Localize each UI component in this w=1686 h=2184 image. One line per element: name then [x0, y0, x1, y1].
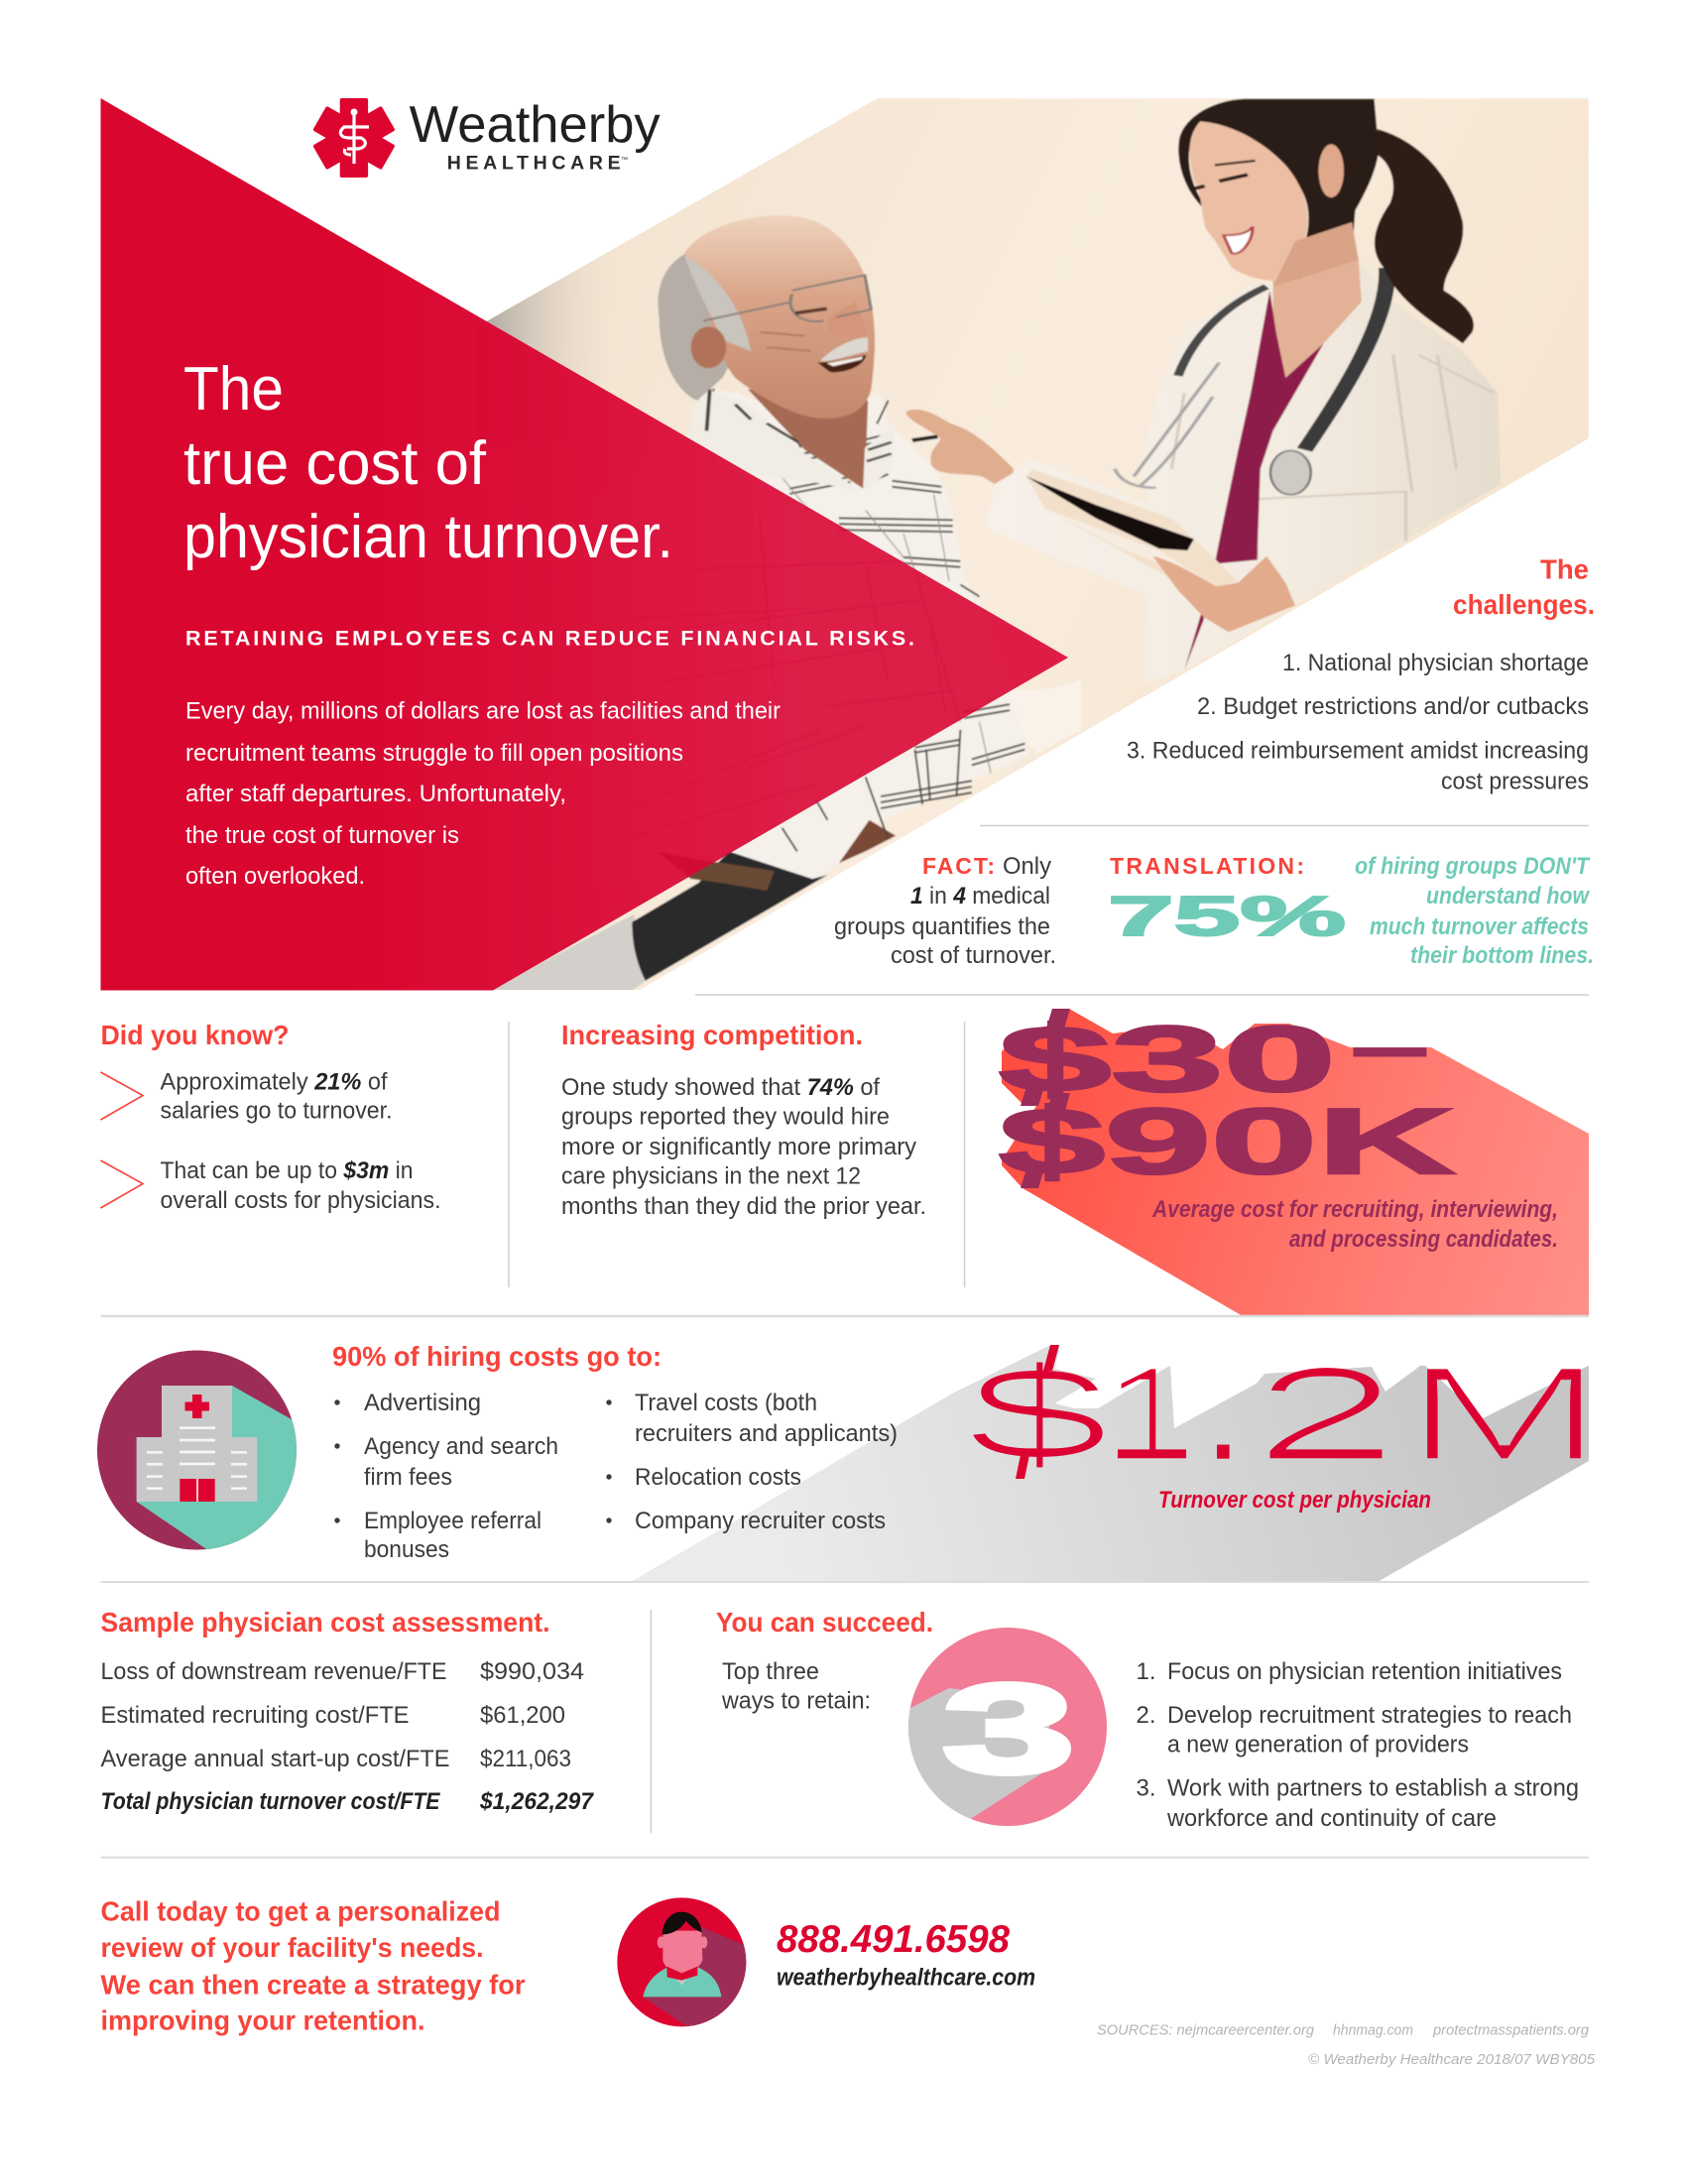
- contact details: weatherbyhealthcare.com: [777, 1965, 1035, 1992]
- cost table: Loss of downstream revenue/FTE: [101, 1658, 446, 1685]
- hero paragraph: the true cost of turnover is: [185, 822, 459, 849]
- fact text 2: That can be up to $3m in: [161, 1157, 413, 1184]
- sources: SOURCES: nejmcareercenter.org: [1097, 2022, 1315, 2039]
- stat panel: $30–$90K: [999, 993, 1589, 1316]
- challenges list: cost pressures: [1441, 769, 1589, 795]
- cost table: $61,200: [480, 1702, 565, 1729]
- copyright: © Weatherby Healthcare 2018/07 WBY805: [1308, 2051, 1596, 2068]
- big figure: $: [965, 1341, 1112, 1487]
- body text: One study showed that 74% of: [561, 1074, 880, 1101]
- fact callout: FACT:: [922, 853, 995, 879]
- panel: hiring costs: [332, 1341, 1589, 1582]
- list column 2: recruiters and applicants): [635, 1420, 898, 1447]
- contact details: 888.491.6598: [777, 1918, 1010, 1961]
- wordmark: Weatherby: [410, 96, 661, 154]
- fact text 2: overall costs for physicians.: [161, 1187, 440, 1214]
- retention list: 3.: [1137, 1775, 1156, 1802]
- fact text 1: salaries go to turnover.: [161, 1097, 393, 1125]
- list column 2: Travel costs (both: [635, 1390, 817, 1416]
- list column 1: bonuses: [364, 1536, 449, 1563]
- fact callout: [834, 853, 1056, 969]
- panel: did you know: [101, 1020, 440, 1214]
- icon: number 3 circle: 3: [942, 1658, 1075, 1800]
- big figure: M: [1402, 1341, 1606, 1487]
- fact text 1: Approximately 21% of: [161, 1069, 388, 1096]
- sources: protectmasspatients.org: [1432, 2022, 1590, 2039]
- icon: chevron 1: [101, 1072, 143, 1120]
- call to action text: Call today to get a personalized: [101, 1896, 500, 1927]
- hero paragraph: often overlooked.: [185, 863, 365, 890]
- hero paragraph: [185, 698, 781, 890]
- stat: $1.2M turnover cost: [965, 1341, 1606, 1514]
- call to action text: review of your facility's needs.: [101, 1932, 484, 1963]
- sources: [1097, 2022, 1590, 2039]
- hero paragraph: after staff departures. Unfortunately,: [185, 781, 566, 807]
- body text: [561, 1074, 926, 1220]
- list column 2: Relocation costs: [635, 1464, 801, 1491]
- icon: chevron 2: [101, 1160, 143, 1208]
- translation stat: 75%: much turnover affects: [1370, 913, 1589, 940]
- heading: Sample physician cost assessment.: [101, 1607, 549, 1638]
- heading: 90% of hiring costs go to:: [332, 1341, 662, 1372]
- list column 1: Employee referral: [364, 1508, 542, 1534]
- fact text 2: [161, 1157, 440, 1214]
- translation stat: 75%: their bottom lines.: [1410, 942, 1594, 969]
- heading: the challenges: The: [1540, 554, 1589, 585]
- hero photo: patient and doctor: [476, 98, 1589, 992]
- logo: Weatherby Healthcare: [312, 96, 661, 178]
- body text: groups reported they would hire: [561, 1103, 890, 1130]
- cost table: $1,262,297: [479, 1788, 595, 1815]
- translation stat: 75%: TRANSLATION:: [1110, 853, 1304, 879]
- big figure: .: [1205, 1341, 1242, 1487]
- hero title: true cost of: [183, 429, 487, 498]
- big figure: [965, 1341, 1606, 1487]
- cost table: $211,063: [480, 1746, 571, 1772]
- heading: You can succeed.: [716, 1607, 933, 1638]
- retention list: Focus on physician retention initiatives: [1167, 1658, 1562, 1685]
- fact callout: 1 in 4 medical: [910, 883, 1050, 910]
- list column 1: Advertising: [364, 1390, 481, 1416]
- intro text: [721, 1658, 871, 1715]
- gray long shadow band: [631, 1345, 1589, 1582]
- list column 1: Agency and search: [364, 1433, 558, 1460]
- icon: medical star: [312, 98, 396, 178]
- intro text: Top three: [722, 1658, 819, 1685]
- red triangle panel: [101, 98, 1068, 990]
- panel: sample physician cost assessment: [101, 1607, 595, 1815]
- cost table: Average annual start-up cost/FTE: [101, 1746, 450, 1772]
- cost table: $990,034: [480, 1658, 584, 1685]
- panel: increasing competition: [561, 1020, 926, 1220]
- heading: Did you know?: [101, 1020, 290, 1050]
- retention list: 2.: [1137, 1702, 1156, 1729]
- hero title: The: [183, 355, 284, 424]
- fact callout: Only: [1003, 853, 1051, 880]
- big figure: 1: [1099, 1341, 1200, 1487]
- translation stat: 75%: understand how: [1426, 883, 1590, 910]
- heading: the challenges: [1453, 554, 1595, 620]
- hero paragraph: Every day, millions of dollars are lost as facilities and their: [185, 698, 781, 724]
- hero title: physician turnover.: [183, 503, 673, 571]
- big figure: 2: [1252, 1341, 1400, 1487]
- body text: months than they did the prior year.: [561, 1193, 926, 1220]
- call to action text: We can then create a strategy for: [101, 1970, 526, 2001]
- intro text: ways to retain:: [721, 1688, 871, 1715]
- call to action text: [101, 1896, 526, 2036]
- cost table: Estimated recruiting cost/FTE: [101, 1702, 409, 1729]
- icon: number 3 circle: [908, 1628, 1107, 1826]
- list column 2: [606, 1390, 898, 1534]
- cost table: [101, 1658, 595, 1815]
- translation stat: 75%: of hiring groups DON'T: [1355, 853, 1591, 880]
- contact details: [777, 1918, 1035, 1992]
- list column 1: [334, 1390, 558, 1563]
- retention list: a new generation of providers: [1167, 1732, 1469, 1759]
- list column 2: Company recruiter costs: [635, 1508, 886, 1534]
- challenges list: [1127, 650, 1589, 795]
- challenges list: 3. Reduced reimbursement amidst increasing: [1127, 738, 1589, 764]
- big figure: –: [1349, 993, 1431, 1097]
- wordmark subline: HEALTHCARE: [447, 153, 621, 175]
- retention list: Develop recruitment strategies to reach: [1167, 1702, 1572, 1729]
- sources: hhnmag.com: [1333, 2022, 1413, 2039]
- hero paragraph: recruitment teams struggle to fill open positions: [185, 740, 683, 767]
- heading: Increasing competition.: [561, 1020, 863, 1050]
- big figure: $30: [999, 1007, 1336, 1111]
- hero subheading: RETAINING EMPLOYEES CAN REDUCE FINANCIAL RISKS.: [185, 627, 914, 651]
- long shadow band: [1002, 1009, 1589, 1316]
- caption: and processing candidates.: [1289, 1226, 1558, 1253]
- retention list: [1137, 1658, 1579, 1832]
- caption: [1151, 1196, 1558, 1253]
- body text: more or significantly more primary: [561, 1134, 916, 1160]
- retention list: Work with partners to establish a strong: [1167, 1775, 1579, 1802]
- hero title: [183, 355, 673, 571]
- caption: Average cost for recruiting, interviewing,: [1151, 1196, 1558, 1223]
- body text: care physicians in the next 12: [561, 1162, 861, 1190]
- fact text 1: [161, 1069, 393, 1125]
- fact callout: cost of turnover.: [891, 942, 1056, 969]
- translation stat: 75%: 75%: [1108, 885, 1346, 948]
- list column 1: firm fees: [364, 1464, 452, 1491]
- call to action text: improving your retention.: [101, 2005, 424, 2036]
- challenges list: 1. National physician shortage: [1282, 650, 1589, 676]
- icon: hospital: [97, 1351, 297, 1549]
- translation stat: 75%: [1108, 853, 1594, 969]
- retention list: 1.: [1137, 1658, 1156, 1685]
- icon: person: [617, 1897, 751, 2033]
- big figure: [999, 993, 1455, 1193]
- cost table: Total physician turnover cost/FTE: [101, 1788, 440, 1815]
- retention list: workforce and continuity of care: [1166, 1805, 1497, 1832]
- trademark: ™: [621, 157, 628, 164]
- fact callout: groups quantifies the: [834, 913, 1050, 940]
- caption: Turnover cost per physician: [1158, 1487, 1431, 1514]
- challenges list: 2. Budget restrictions and/or cutbacks: [1197, 693, 1589, 720]
- heading: the challenges: challenges.: [1453, 589, 1595, 620]
- panel: you can succeed: [716, 1607, 1579, 1845]
- big figure: $90K: [999, 1089, 1455, 1193]
